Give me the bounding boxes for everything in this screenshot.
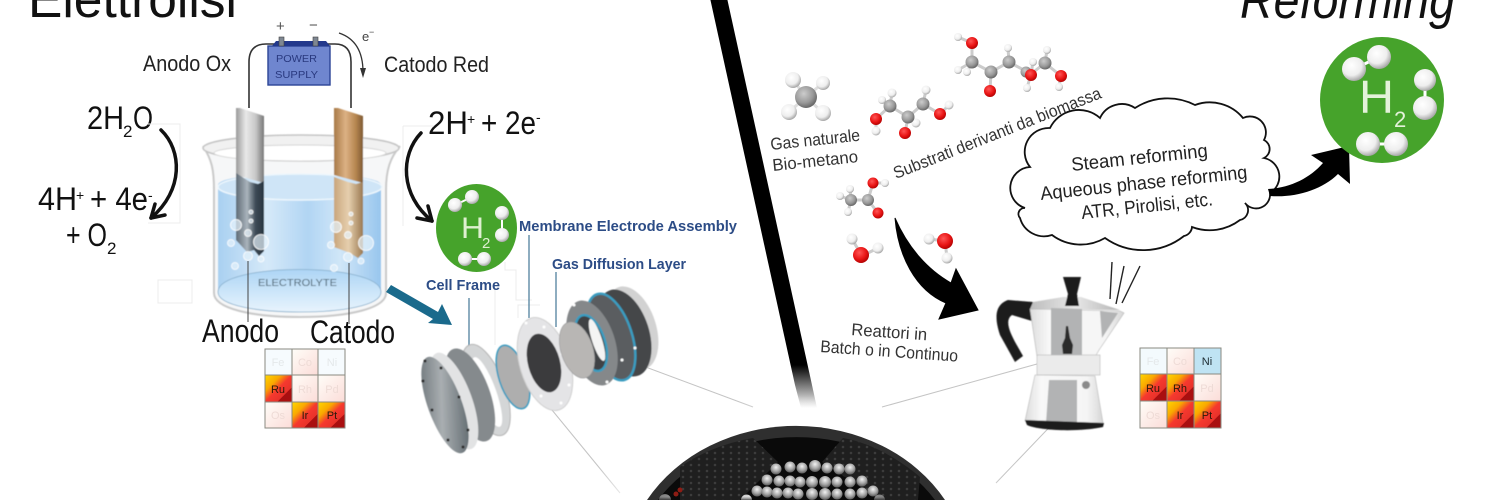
label: Gas Diffusion Layer: Gas Diffusion Layer — [552, 256, 686, 273]
label: Gas naturale Bio-metano — [769, 126, 861, 175]
H2 badge large: H — [1359, 71, 1394, 123]
electron flow arrow: e — [362, 29, 369, 44]
upper body — [1030, 309, 1124, 357]
labels: Anodo and Catodo with leaders: Catodo — [310, 314, 395, 350]
equation: 4H+ + 4e-: + 4e — [90, 181, 148, 217]
safety valve — [1082, 381, 1090, 389]
periodic table left: Fe — [272, 357, 284, 369]
periodic table right: Pt — [1202, 410, 1212, 422]
periodic table right: Ru — [1146, 383, 1160, 395]
H2 badge large — [1320, 37, 1444, 163]
lid knob — [1063, 277, 1081, 306]
equation: 2H+ + 2e-: + — [467, 111, 475, 127]
equation: + O2: + O — [66, 217, 107, 253]
molecule: glycerol — [870, 86, 954, 139]
label: Reattori in Batch o in Continuo — [820, 320, 959, 366]
power supply with wires: SUPPLY — [275, 70, 318, 81]
label: Membrane Electrode Assembly: Membrane Electrode Assembly — [519, 218, 738, 235]
catalyst nanoparticle dome — [647, 426, 945, 500]
periodic table left: Pt — [327, 410, 337, 422]
label: Electrolyte: ELECTROLYTE — [258, 277, 337, 289]
equation: 2H2O — [87, 100, 153, 141]
periodic table right: Pd — [1200, 383, 1214, 395]
equation: 2H+ + 2e-: + 2e — [481, 105, 536, 141]
power supply with wires — [249, 17, 351, 108]
moka pot reactor — [997, 277, 1124, 430]
methane molecule — [781, 72, 831, 121]
metal atoms — [659, 460, 885, 500]
labels: Anodo and Catodo with leaders — [202, 261, 395, 350]
H2 badge small: 2 — [482, 235, 490, 252]
electron flow arrow — [339, 27, 374, 78]
equation: 2H+ + 2e-: 2H — [428, 105, 468, 141]
lower panel — [1046, 380, 1077, 424]
periodic table right: Co — [1173, 356, 1187, 368]
membrane gasket — [507, 311, 583, 417]
equation: 4H+ + 4e-: + — [76, 187, 84, 203]
periodic table right — [1140, 348, 1221, 428]
collar — [1037, 355, 1100, 375]
cloud: reforming processes: Steam reforming — [1070, 141, 1209, 176]
periodic table left: Ni — [327, 357, 337, 369]
catalyst disc blue edge — [489, 341, 537, 413]
cloud: reforming processes: ATR, Pirolisi, etc. — [1080, 189, 1214, 224]
periodic table left: Os — [271, 410, 286, 422]
power supply with wires: − — [309, 17, 318, 34]
dark facets — [680, 438, 920, 500]
equation: 4H+ + 4e-: 4H — [38, 181, 77, 217]
electrolyser exploded stack — [412, 280, 668, 459]
arrow: proton reduction — [406, 133, 432, 221]
periodic table left: Ir — [302, 410, 309, 422]
electrolyte water — [218, 174, 382, 312]
molecule: water 2 — [924, 233, 953, 264]
periodic table right: Os — [1146, 410, 1161, 422]
arrow: cloud to H2 — [1268, 146, 1350, 196]
divider: diagonal black line — [710, 0, 817, 408]
equation: 2H2O: 2H — [87, 100, 124, 136]
periodic table right: Fe — [1147, 356, 1159, 368]
steam lines — [1110, 262, 1140, 304]
periodic table right: Rh — [1173, 383, 1187, 395]
spout shadow and panel — [1051, 308, 1118, 357]
arrow: water oxidation — [151, 130, 176, 218]
equation: 2H+ + 2e-: - — [536, 109, 541, 125]
labels: Anodo and Catodo with leaders: Anodo — [202, 313, 279, 349]
equation: 4H+ + 4e- — [38, 181, 153, 217]
power supply with wires: POWER — [276, 54, 317, 65]
molecule: water 1 — [846, 234, 884, 263]
periodic table left: Rh — [298, 384, 312, 396]
cloud: reforming processes — [1010, 98, 1279, 250]
periodic table left: Co — [298, 357, 312, 369]
zoom leader lines — [552, 350, 1085, 493]
leader lines to stack — [469, 235, 556, 346]
electron flow arrow: − — [369, 27, 374, 37]
periodic table right: Ir — [1177, 410, 1184, 422]
anode electrode — [236, 108, 264, 256]
arrow: blue toward electrolyser — [386, 285, 452, 325]
beaker body — [203, 135, 400, 317]
dome interior — [658, 437, 935, 500]
periodic table left: Ru — [271, 384, 285, 396]
lid — [1030, 297, 1120, 310]
H2 badge large: 2 — [1394, 107, 1406, 132]
brand logo figure — [1062, 326, 1073, 354]
label: Substrati derivanti da biomassa: Substrati derivanti da biomassa — [891, 83, 1104, 183]
label: Anodo Ox: Anodo Ox — [143, 51, 231, 76]
periodic table left: Pd — [325, 384, 339, 396]
equation: 2H+ + 2e- — [428, 105, 541, 141]
molecule: sugar chain — [954, 33, 1067, 97]
cloud: reforming processes: Aqueous phase reforming — [1039, 162, 1248, 205]
bubbles — [228, 210, 374, 272]
periodic table right: Ni — [1202, 356, 1212, 368]
handle — [997, 300, 1033, 362]
label: Reattori in Batch o in Continuo: Reattori in — [851, 320, 928, 344]
periodic table left — [265, 349, 345, 428]
cathode electrode — [334, 108, 363, 258]
molecule: acetic acid — [836, 178, 889, 218]
H2 badge small — [436, 184, 517, 272]
label: Cell Frame: Cell Frame — [426, 277, 500, 294]
power supply with wires: + — [276, 18, 285, 35]
equation: 4H+ + 4e-: - — [148, 187, 153, 203]
label: Reattori in Batch o in Continuo: Batch o in Continuo — [820, 337, 959, 366]
faint artefact boxes — [148, 124, 540, 345]
right flange stack — [557, 280, 668, 392]
red support atoms — [674, 488, 682, 496]
label: Gas naturale Bio-metano: Gas naturale — [769, 126, 861, 154]
equation: + O2: 2 — [107, 239, 116, 258]
gas diffusion layer disc — [553, 317, 601, 383]
lower body — [1025, 375, 1103, 423]
dome rim — [647, 426, 945, 500]
cell frame plates — [412, 338, 520, 459]
arrow: feedstock to moka reactor — [895, 218, 978, 319]
base — [1025, 420, 1104, 430]
white glow behind catalyst — [556, 395, 1036, 500]
equation: 2H2O: O — [133, 100, 153, 136]
label: Gas naturale Bio-metano: Bio-metano — [771, 147, 859, 175]
label: Catodo Red: Catodo Red — [384, 52, 489, 77]
electrolysis cell: beaker with electrodes — [203, 108, 400, 317]
equation: 2H2O: 2 — [123, 122, 132, 141]
H2 badge small: H — [461, 212, 484, 245]
